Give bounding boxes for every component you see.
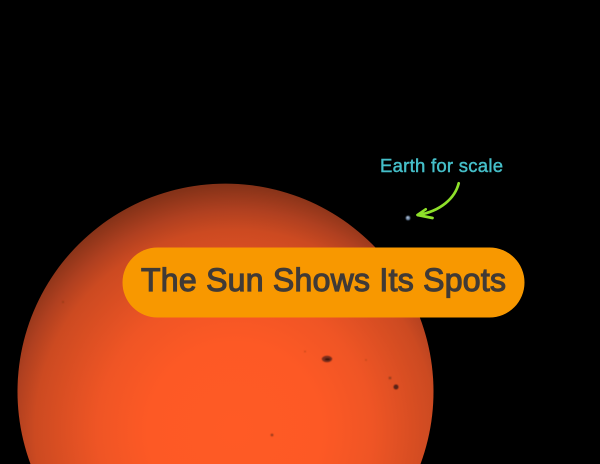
sun disc [18,184,434,464]
sunspot: lower left [271,434,273,436]
icon: Earth [406,216,410,220]
label: Earth for scale: Earth for scale [380,155,503,176]
sunspot group: large [322,356,332,362]
sunspot: right [394,384,398,390]
sunspot: faint far left [62,301,64,303]
sunspot: faint top [304,350,306,352]
arrow pointing at Earth [418,183,459,218]
title banner [122,248,524,318]
title: The Sun Shows Its Spots [141,262,506,298]
sunspot: small upper right [388,376,392,380]
sun with sunspots [18,184,434,464]
banner pill [122,248,524,318]
sunspot: faint mid [365,359,367,361]
